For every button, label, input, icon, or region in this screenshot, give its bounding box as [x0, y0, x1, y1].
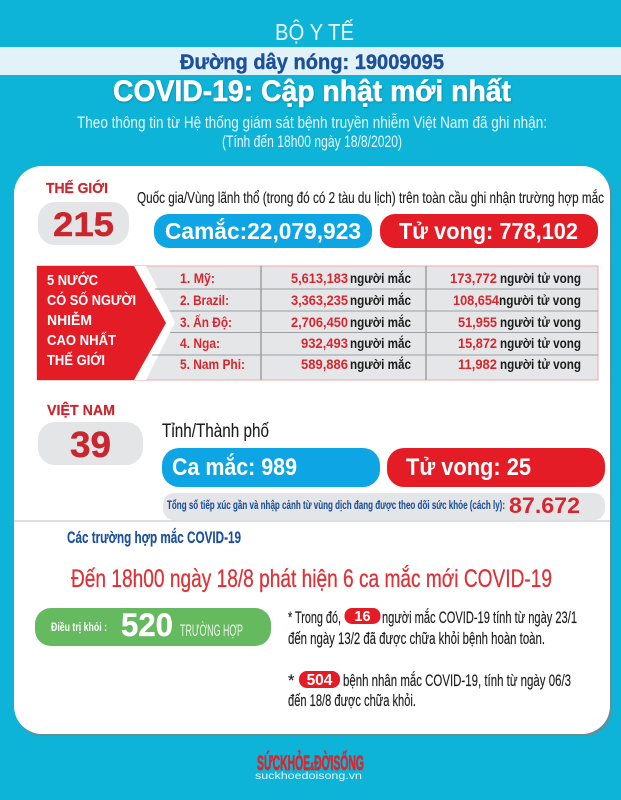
Vietnam deaths	[387, 448, 605, 487]
row: USA: 1. Mỹ:	[180, 271, 215, 286]
note: 504 patients: đến 18/8 được chữa khỏi.	[288, 692, 416, 710]
red arrow label	[37, 266, 166, 380]
world cases	[154, 214, 372, 248]
panel: Vietnam	[38, 401, 605, 520]
panel: white card	[14, 166, 612, 736]
badge: 16	[344, 608, 380, 625]
logo: Sức khỏe & Đời sống: SỨCKHỎE&ĐỜISỐNG	[257, 751, 364, 775]
recovered pill	[35, 607, 271, 646]
logo: Sức khỏe & Đời sống: suckhoedoisong.vn	[255, 770, 362, 782]
Vietnam cases	[162, 448, 380, 487]
world count: 215	[53, 206, 114, 244]
row: USA: người tử vong	[500, 271, 581, 286]
row: USA: người mắc	[350, 271, 411, 286]
world heading: THẾ GIỚI	[46, 179, 108, 197]
Vietnam heading: VIỆT NAM	[47, 401, 115, 419]
row: South Africa: 5. Nam Phi:	[180, 357, 245, 372]
row: Brazil: 3,363,235	[291, 293, 348, 308]
Vietnam count: 39	[70, 424, 111, 465]
row: India: 51,955	[458, 315, 497, 330]
note: 16 patients	[288, 608, 577, 648]
row: Brazil: 108,654	[453, 293, 499, 308]
row: South Africa	[180, 357, 581, 372]
row: South Africa: người mắc	[350, 357, 411, 372]
red arrow label: NHIỄM	[47, 312, 92, 329]
note: 16 patients: * Trong đó,	[288, 609, 341, 627]
row: Brazil: người mắc	[350, 293, 411, 308]
contact tracing bar: 87.672	[509, 493, 580, 518]
section heading: Các trường hợp mắc COVID-19	[67, 528, 241, 547]
row: USA: 173,772	[450, 271, 497, 286]
row: Russia: người mắc	[350, 336, 411, 351]
red arrow label: 5 NƯỚC	[47, 271, 98, 289]
row: India: 3. Ấn Độ:	[180, 315, 232, 330]
recovered pill: 520	[121, 607, 173, 643]
row: Russia: 932,493	[301, 336, 348, 351]
row: India	[180, 315, 581, 330]
row: Russia: người tử vong	[500, 336, 581, 351]
logo: Sức khỏe & Đời sống	[255, 751, 364, 782]
world count	[38, 202, 129, 245]
subtitle	[77, 113, 547, 151]
Vietnam cases: Ca mắc: 989	[172, 453, 297, 481]
row: Russia: 4. Nga:	[180, 336, 220, 351]
row: USA	[180, 271, 581, 286]
Vietnam deaths: Tử vong: 25	[406, 454, 531, 481]
row: Brazil	[180, 293, 581, 308]
contact tracing bar	[163, 493, 605, 520]
recovered pill: TRƯỜNG HỢP	[180, 621, 243, 640]
panel: COVID-19 cases	[35, 528, 577, 710]
badge: 504: 504	[307, 672, 333, 689]
note: 504 patients	[288, 671, 571, 710]
white chevron	[134, 266, 175, 380]
red arrow label: CÓ SỐ NGƯỜI	[47, 291, 136, 309]
note: 504 patients: *	[288, 672, 295, 690]
row: Brazil: người tử vong	[499, 293, 581, 308]
hotline band	[0, 47, 621, 75]
row: India: 2,706,450	[291, 315, 348, 330]
red arrow label: CAO NHẤT	[47, 332, 116, 349]
row: Brazil: 2. Brazil:	[180, 293, 229, 308]
row: India: người tử vong	[500, 315, 581, 330]
title: COVID-19: Cập nhật mới nhất	[113, 75, 511, 108]
row: USA: 5,613,183	[291, 271, 348, 286]
world deaths	[380, 214, 598, 248]
row: South Africa: 11,982	[458, 357, 497, 372]
badge: 504	[299, 671, 340, 689]
row: South Africa: người tử vong	[500, 357, 581, 372]
badge: 16: 16	[354, 609, 371, 625]
red arrow label: THẾ GIỚI	[47, 351, 105, 369]
table: top 5 countries	[37, 266, 598, 380]
ministry name: BỘ Y TẾ	[275, 18, 354, 45]
Vietnam count	[38, 422, 143, 465]
hotline band: Đường dây nóng: 19009095	[180, 51, 444, 74]
row: Russia	[180, 336, 581, 351]
row: India: người mắc	[350, 315, 411, 330]
provinces label: Tỉnh/Thành phố	[162, 421, 269, 442]
row: Russia: 15,872	[458, 336, 497, 351]
subtitle: (Tính đến 18h00 ngày 18/8/2020)	[222, 132, 402, 151]
world cases: Camắc:22,079,923	[165, 217, 361, 244]
world deaths: Tử vong: 778,102	[399, 218, 578, 244]
header	[0, 18, 621, 151]
recovered pill: Điều trị khỏi :	[51, 622, 107, 634]
panel: world	[38, 179, 604, 248]
row: South Africa: 589,886	[301, 357, 348, 372]
